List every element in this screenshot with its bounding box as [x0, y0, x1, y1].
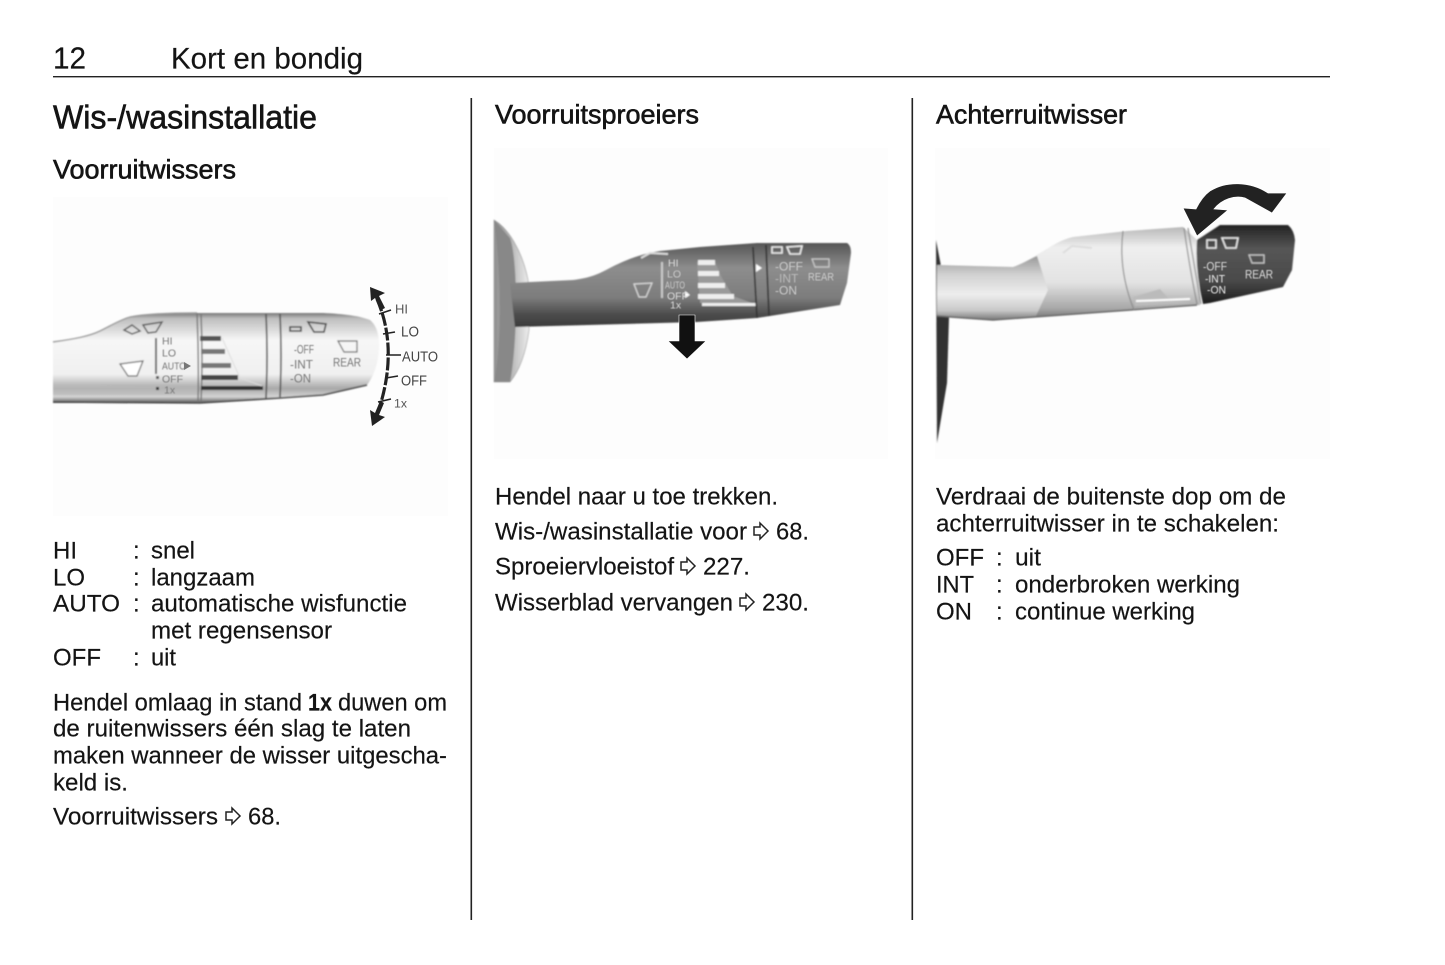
lever labels: AUTO	[665, 280, 685, 292]
legend: wiper positions: uit	[151, 644, 176, 672]
legend: rear wiper positions: :	[996, 544, 1003, 572]
legend: wiper positions: AUTO	[53, 590, 120, 618]
arrow: rotation both ways	[1183, 184, 1287, 236]
illustration: wiper lever with positions	[53, 197, 448, 516]
lever labels: -OFF	[294, 342, 314, 356]
icon: position scale with arrows: LO	[401, 324, 419, 340]
legend: wiper positions: :	[133, 644, 140, 672]
paragraph: one-stroke wipe: maken wanneer de wisser uitgescha-	[53, 742, 447, 770]
section title: Kort en bondig	[171, 42, 363, 76]
lever labels: AUTO	[162, 360, 186, 372]
sub heading: Voorruitwissers	[53, 154, 236, 184]
legend: rear wiper positions: INT	[936, 572, 974, 598]
lever labels	[1203, 260, 1273, 296]
legend: rear wiper positions: :	[996, 598, 1003, 626]
panel: voorruitwissers column	[53, 98, 448, 830]
lever labels: OFF	[667, 290, 688, 302]
legend: wiper positions	[53, 538, 407, 672]
page header	[53, 40, 1330, 77]
legend: wiper positions: met regensensor	[151, 618, 332, 644]
legend: rear wiper positions: :	[996, 572, 1003, 598]
cross reference: wis-/wasinstallatie: 68.	[776, 518, 809, 546]
heading: Voorruitsproeiers	[495, 100, 699, 130]
cross reference: wis-/wasinstallatie: Wis-/wasinstallatie voor	[495, 518, 747, 546]
legend: wiper positions: automatische wisfunctie	[151, 590, 407, 618]
header rule	[53, 76, 1330, 77]
legend: rear wiper positions: uit	[1015, 544, 1041, 572]
paragraph: one-stroke wipe: de ruitenwissers één slag te laten	[53, 716, 411, 742]
panel: voorruitsproeiers column	[494, 100, 888, 616]
lever labels: -OFF	[1203, 260, 1227, 274]
icon: position scale with arrows: OFF	[401, 372, 427, 390]
page number: 12	[53, 40, 86, 76]
icon: position scale with arrows: HI	[395, 302, 408, 316]
intro text: Verdraai de buitenste dop om de	[936, 484, 1286, 510]
legend: wiper positions: LO	[53, 564, 85, 592]
paragraph: one-stroke wipe: duwen om	[338, 690, 447, 716]
heading: Achterruitwisser	[936, 100, 1127, 130]
legend: wiper positions: snel	[151, 538, 195, 564]
lever labels: HI	[668, 258, 678, 270]
paragraph: one-stroke wipe	[53, 690, 447, 796]
lever labels: -ON	[1207, 284, 1226, 296]
lever labels: 1x	[164, 384, 176, 396]
cross reference: 68.	[248, 804, 281, 830]
lever labels: -INT	[290, 358, 314, 372]
legend: rear wiper positions: onderbroken werking	[1015, 572, 1240, 598]
lever labels: -INT	[1205, 274, 1225, 286]
legend: wiper positions: :	[133, 590, 140, 618]
intro text: achterruitwisser in te schakelen:	[936, 510, 1279, 538]
legend: rear wiper positions	[936, 544, 1240, 626]
legend: rear wiper positions: continue werking	[1015, 598, 1195, 626]
lever labels: OFF	[162, 374, 183, 386]
panel: achterruitwisser column	[935, 100, 1330, 626]
lever labels	[665, 258, 834, 312]
body text: Hendel naar u toe trekken.	[495, 484, 778, 510]
legend: rear wiper positions: OFF	[936, 544, 984, 572]
lever labels: REAR	[333, 356, 361, 370]
lever labels	[162, 336, 361, 396]
arrow: pull down	[668, 315, 706, 359]
cross reference: Voorruitwissers	[53, 804, 218, 830]
lever labels: LO	[667, 268, 681, 280]
lever labels: -OFF	[775, 260, 803, 274]
legend: wiper positions: :	[133, 538, 140, 564]
illustration: rear wiper rotating cap	[935, 148, 1330, 459]
cross reference: sproeiervloeistof: Sproeiervloeistof	[495, 554, 674, 580]
lever labels: 1x	[670, 300, 682, 312]
lever labels: LO	[162, 348, 176, 360]
intro text	[936, 484, 1286, 538]
lever labels: HI	[162, 336, 172, 348]
illustration: lever pulled towards driver	[494, 148, 888, 459]
icon: position scale with arrows: 1x	[394, 396, 407, 410]
lever labels: REAR	[808, 272, 834, 284]
lever labels: REAR	[1245, 268, 1273, 282]
paragraph: one-stroke wipe: keld is.	[53, 770, 128, 796]
icon: position scale with arrows: AUTO	[402, 348, 438, 366]
cross reference: sproeiervloeistof: 227.	[703, 554, 750, 580]
cross reference: wisserblad: Wisserblad vervangen	[495, 590, 733, 616]
paragraph: one-stroke wipe: Hendel omlaag in stand	[53, 690, 302, 716]
lever labels: -ON	[290, 372, 311, 386]
column divider right	[912, 98, 913, 920]
column divider left	[470, 98, 472, 920]
main heading: Wis-/wasinstallatie	[53, 98, 317, 136]
legend: wiper positions: HI	[53, 538, 77, 564]
legend: wiper positions: :	[133, 564, 140, 592]
lever labels: -ON	[775, 284, 797, 298]
legend: rear wiper positions: ON	[936, 598, 972, 626]
cross reference: wisserblad: 230.	[762, 590, 809, 616]
lever labels: -INT	[775, 272, 799, 286]
icon: position scale with arrows	[370, 287, 438, 426]
legend: wiper positions: langzaam	[151, 564, 255, 592]
paragraph: one-stroke wipe: 1x	[308, 690, 333, 716]
legend: wiper positions: OFF	[53, 644, 101, 672]
